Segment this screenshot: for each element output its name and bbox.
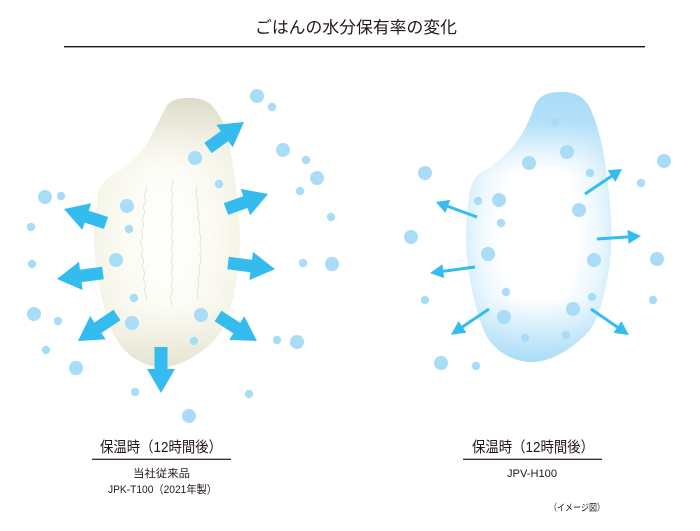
panel: JPV-H100 rice grain [404, 92, 671, 480]
label: conventional model: JPK-T100（2021年製） [108, 482, 217, 496]
label rule: conventional [92, 459, 231, 460]
title: ごはんの水分保有率の変化 [255, 18, 457, 37]
label rule: JPV-H100 [463, 459, 602, 460]
panel: conventional rice grain [27, 89, 339, 496]
rice grain wrinkles [140, 180, 201, 306]
rice grain: conventional [94, 98, 240, 367]
title rule [64, 46, 645, 47]
label: conventional heading: 保温時（12時間後） [100, 439, 222, 456]
label: conventional model [108, 466, 217, 496]
label: JPV-H100 heading: 保温時（12時間後） [472, 439, 594, 456]
thin moisture-loss arrows [429, 163, 641, 341]
thick moisture-loss arrows [55, 111, 277, 393]
label: conventional model: 当社従来品 [133, 466, 190, 480]
label: JPV-H100 model: JPV-H100 [507, 468, 557, 480]
water droplets: JPV-H100 [404, 118, 671, 370]
water droplets: conventional [27, 89, 339, 423]
rice grain: JPV-H100 [466, 92, 611, 362]
image note: （イメージ図） [549, 502, 605, 514]
